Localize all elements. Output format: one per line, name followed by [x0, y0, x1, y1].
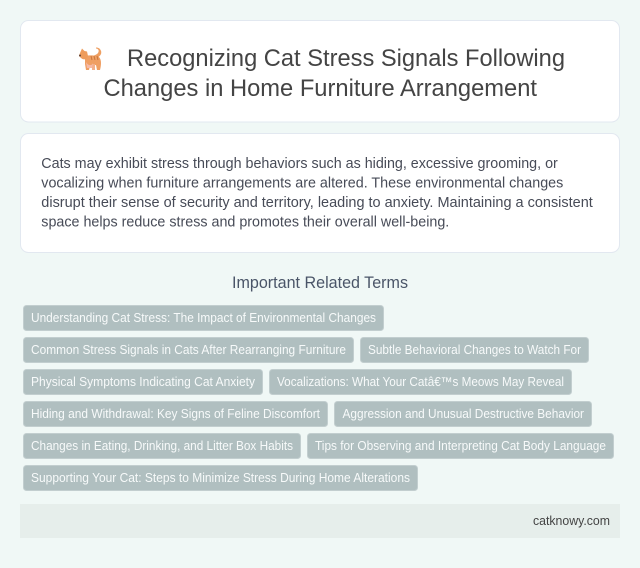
tag: [24, 338, 354, 362]
panel: description: space helps reduce stress and promotes their overall well-being.: [41, 214, 449, 230]
panel: related term tags: [24, 306, 614, 490]
tag: [334, 402, 592, 426]
title text: Recognizing Cat Stress Signals Following: [127, 45, 565, 72]
icon: cat: [79, 48, 101, 70]
tag: [24, 402, 328, 426]
panel: description: disrupt their sense of security and territory, leading to anxiety. Maintaining a consistent: [41, 195, 593, 211]
title text: Changes in Home Furniture Arrangement: [104, 75, 537, 102]
panel: description: Cats may exhibit stress through behaviors such as hiding, excessive grooming, or: [41, 156, 558, 172]
tag: Supporting Your Cat: Steps to Minimize Stress During Home Alterations: [31, 471, 410, 485]
panel: description: [20, 134, 620, 252]
tag: [308, 434, 614, 458]
tag: [24, 466, 418, 490]
footer: catknowy.com: [533, 514, 610, 528]
tag: [360, 338, 588, 362]
tag: [270, 370, 572, 394]
tag: Tips for Observing and Interpreting Cat Body Language: [315, 439, 606, 453]
panel: description: vocalizing when furniture arrangements are altered. These environmental changes: [41, 176, 563, 192]
tag: Common Stress Signals in Cats After Rearranging Furniture: [31, 343, 346, 357]
title text: [104, 45, 565, 102]
tag: Hiding and Withdrawal: Key Signs of Feline Discomfort: [31, 407, 321, 421]
tag: Vocalizations: What Your Catâ€™s Meows May Reveal: [277, 375, 564, 389]
tag: Understanding Cat Stress: The Impact of Environmental Changes: [31, 311, 376, 325]
panel: title card: [20, 20, 620, 122]
tag: Aggression and Unusual Destructive Behavior: [342, 407, 584, 421]
footer: [20, 504, 620, 538]
tag: [24, 370, 262, 394]
tag: Physical Symptoms Indicating Cat Anxiety: [31, 375, 256, 389]
tag: Subtle Behavioral Changes to Watch For: [368, 343, 581, 357]
tag: Changes in Eating, Drinking, and Litter Box Habits: [31, 439, 293, 453]
heading: Important Related Terms: Important Related Terms: [232, 274, 408, 292]
tag: [24, 306, 384, 330]
tag: [24, 434, 300, 458]
